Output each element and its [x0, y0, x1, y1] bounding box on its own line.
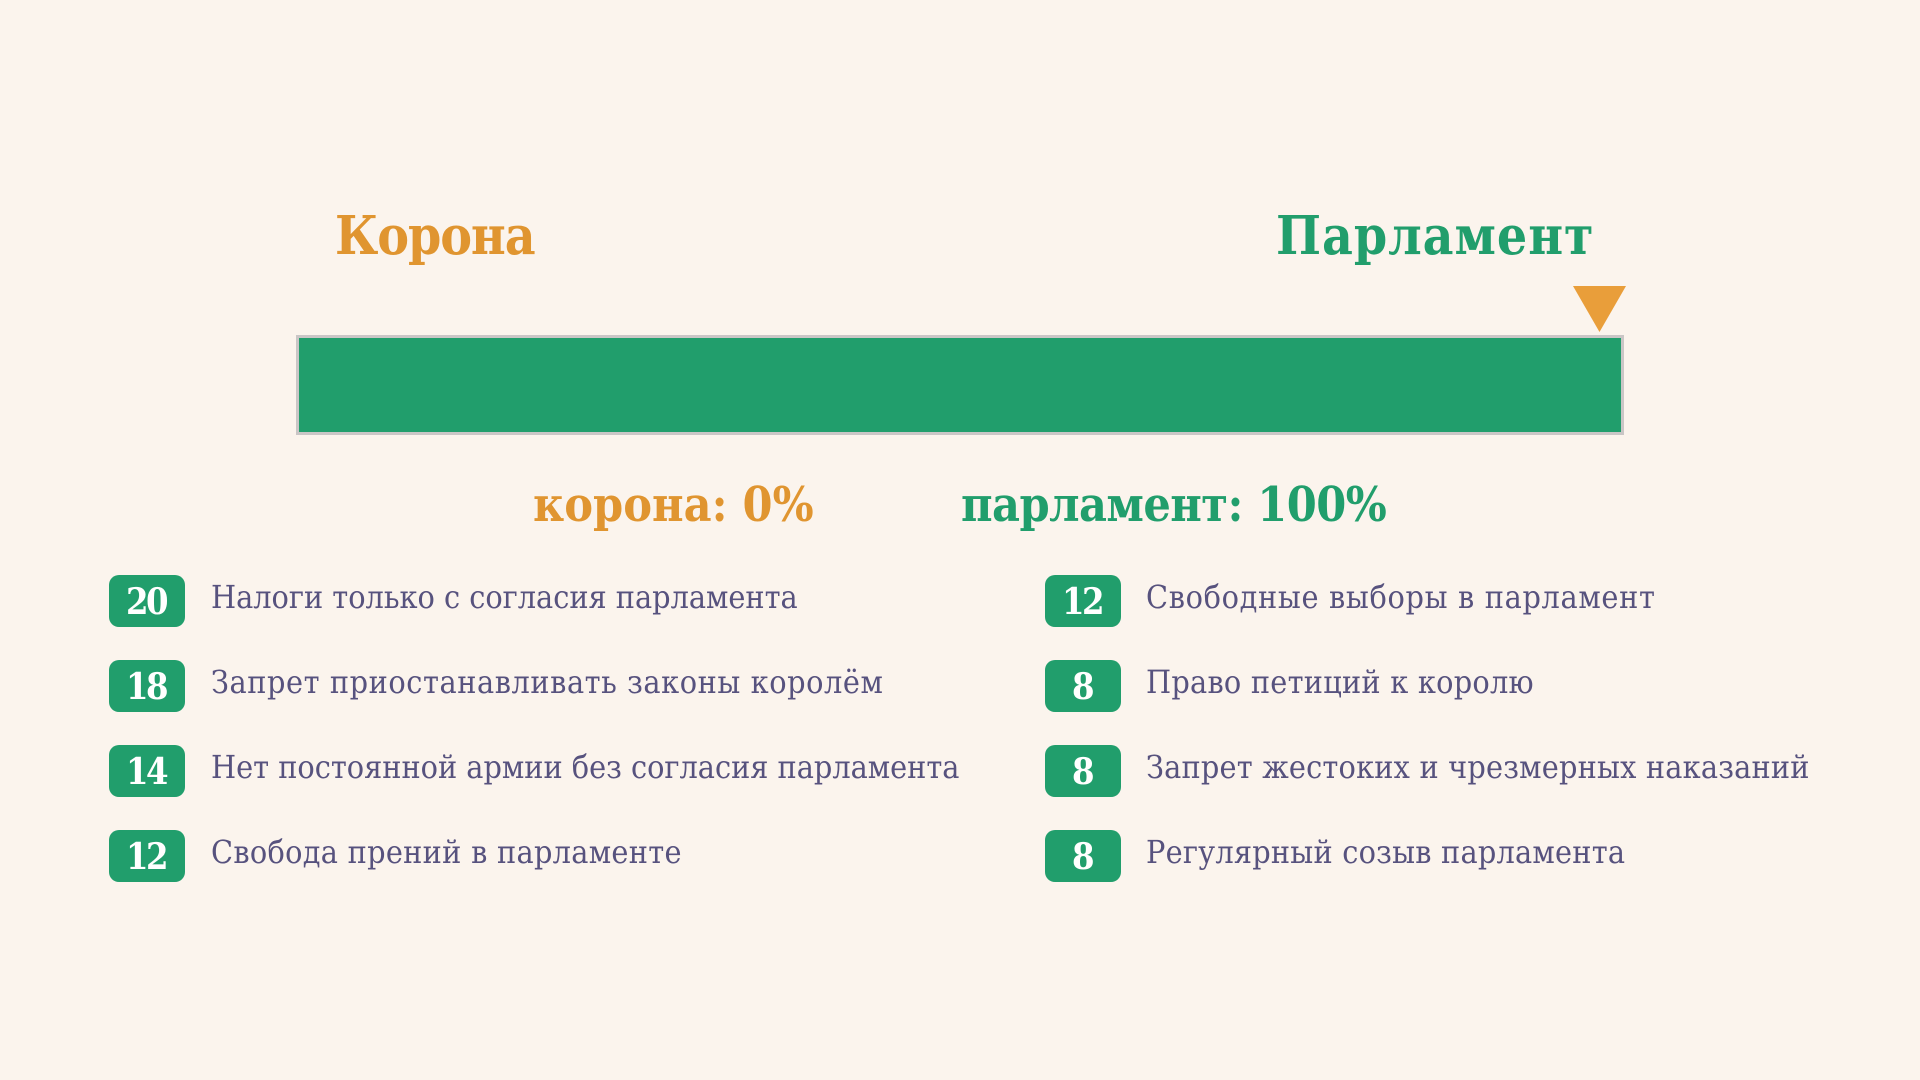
list item: 8	[1045, 660, 1534, 712]
list item: 8: 8	[1072, 836, 1092, 878]
list item: 14	[109, 745, 959, 797]
list item: 8: Регулярный созыв парламента	[1146, 833, 1625, 871]
list item: 18	[109, 660, 884, 712]
heading: Корона: Корона	[335, 205, 535, 267]
list item: 12	[109, 830, 682, 882]
list item: 8: Запрет жестоких и чрезмерных наказаний	[1146, 748, 1810, 786]
list item: 12: 12	[126, 836, 166, 878]
list item: 8	[1045, 745, 1810, 797]
list item: 18: 18	[126, 666, 166, 708]
list item: 8: 8	[1072, 666, 1092, 708]
balance bar	[296, 335, 1624, 435]
list item: 12 right	[1045, 575, 1656, 627]
list item: 12 right: Свободные выборы в парламент	[1146, 578, 1656, 616]
label: корона 0%: корона: 0%	[533, 477, 814, 533]
heading: Парламент: Парламент	[1276, 205, 1595, 267]
list item: 20	[109, 575, 798, 627]
list item: 18: Запрет приостанавливать законы королём	[211, 663, 884, 701]
list item: 14: 14	[126, 751, 166, 793]
list item: 8: Право петиций к королю	[1146, 663, 1534, 701]
list item: 20: Налоги только с согласия парламента	[211, 578, 798, 616]
list item: 14: Нет постоянной армии без согласия парламента	[211, 748, 959, 786]
list item: 12 right: 12	[1062, 581, 1102, 623]
label: парламент 100%: парламент: 100%	[961, 477, 1386, 533]
icon: position marker triangle	[1573, 286, 1626, 332]
list item: 8: 8	[1072, 751, 1092, 793]
list item: 12: Свобода прений в парламенте	[211, 833, 682, 871]
list item: 8	[1045, 830, 1625, 882]
list item: 20: 20	[126, 581, 166, 623]
